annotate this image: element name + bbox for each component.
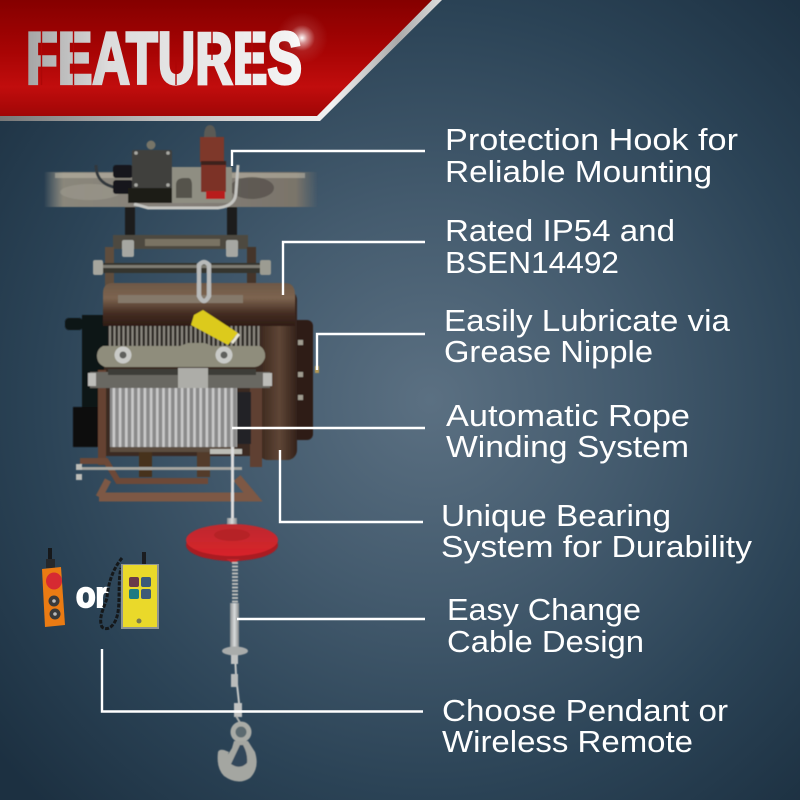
feature label: grease nipple: Grease Nipple [444, 334, 653, 369]
banner red panel [0, 0, 432, 116]
feature label: rated IP54: Rated IP54 and [445, 213, 675, 248]
cable glands [96, 165, 133, 194]
title: FEATURES [26, 18, 302, 100]
or label: or [76, 574, 108, 615]
feature label: rated IP54 [445, 213, 675, 280]
hook [218, 716, 257, 782]
feature label: remote: Choose Pendant or [442, 693, 728, 728]
lower frame [76, 447, 253, 497]
lower rope with ferrules [231, 655, 242, 717]
shackle [199, 262, 209, 301]
feature label: change cable [447, 592, 644, 659]
lens flare [276, 12, 328, 64]
silver bracket with bolts [97, 343, 265, 367]
banner: features [0, 0, 442, 121]
left frame post [98, 370, 106, 465]
feature label: grease nipple: Easily Lubricate via [444, 303, 731, 338]
feature label: grease nipple [444, 303, 731, 369]
leader: change cable [237, 618, 425, 620]
leader: remote [102, 649, 423, 712]
feature label: bearing system: System for Durability [441, 529, 753, 564]
feature label: bearing system [441, 498, 753, 564]
leader lines [102, 151, 425, 712]
guard rail [134, 165, 238, 208]
feature label: rope winding [446, 398, 690, 464]
feature label: protection hook [445, 122, 738, 189]
feature label: protection hook: Protection Hook for [445, 122, 738, 157]
gear [237, 392, 251, 444]
steel tube [230, 603, 239, 650]
leader: grease nipple [317, 334, 425, 370]
silver mounting plate [172, 167, 232, 203]
flange [222, 646, 248, 656]
yellow warning tag [191, 310, 240, 345]
feature label: change cable: Easy Change [447, 592, 641, 627]
mounting rail [44, 172, 318, 207]
upper wire rope [108, 326, 260, 350]
cable collar [227, 518, 237, 534]
wired pendant remote [42, 548, 65, 627]
hoist product illustration [44, 125, 319, 782]
side fill behind drum [104, 366, 262, 456]
leader: protection hook [232, 151, 425, 166]
leader: bearing system [280, 450, 423, 522]
wire rope drum [110, 387, 237, 447]
hanger bolts [125, 207, 135, 235]
feature label: rope winding: Winding System [446, 429, 689, 464]
feature label: remote: Wireless Remote [442, 724, 693, 759]
feature label: protection hook: Reliable Mounting [445, 154, 712, 189]
safety limit switch [200, 125, 226, 199]
upper drum housing [103, 283, 295, 326]
feature label: rated IP54: BSEN14492 [445, 245, 619, 280]
feature label: bearing system: Unique Bearing [441, 498, 671, 533]
black motor body [65, 315, 110, 447]
right frame post [250, 385, 262, 467]
pendant and wireless remote options [42, 548, 159, 629]
wireless remote [121, 552, 159, 629]
upper frame [93, 235, 271, 287]
top cross bar [88, 368, 272, 388]
feature label: remote [442, 693, 728, 759]
feature label: change cable: Cable Design [447, 624, 644, 659]
leader: rope winding [232, 427, 425, 429]
leader: rated IP54 [283, 242, 425, 295]
junction box [128, 140, 172, 203]
banner silver border [0, 0, 442, 121]
bell housing [258, 290, 319, 460]
spring [232, 562, 238, 603]
feature label: rope winding: Automatic Rope [446, 398, 690, 433]
wire cable [231, 447, 234, 522]
red disc stopper [186, 524, 278, 564]
bead chain [101, 558, 122, 629]
